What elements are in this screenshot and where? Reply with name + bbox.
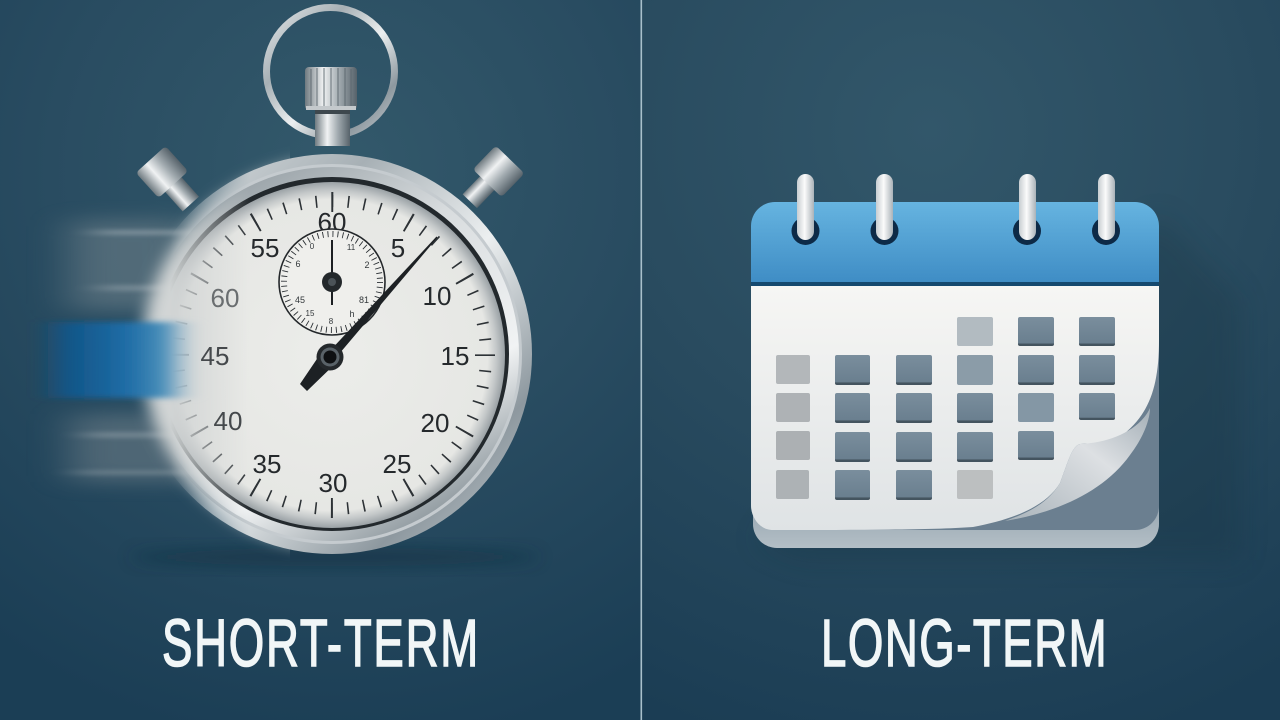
dial numbers: 5 xyxy=(391,233,405,263)
sub-dial xyxy=(279,229,385,335)
minute ticks xyxy=(178,201,486,509)
sub-dial: 2 xyxy=(364,260,370,270)
faded dial numbers: 60 xyxy=(211,283,239,313)
calendar shadow xyxy=(755,215,1240,560)
long second hand xyxy=(300,236,438,391)
motion streaks behind stopwatch xyxy=(70,220,200,482)
calendar date grid xyxy=(776,317,1115,500)
calendar back pages xyxy=(753,300,1159,548)
sub-dial: 15 xyxy=(306,309,315,318)
sub-dial: 6 xyxy=(295,259,301,269)
background: right panel xyxy=(641,0,1280,720)
faded dial numbers: 40 xyxy=(214,406,242,436)
sub-dial: 8 xyxy=(329,317,334,326)
icon: calendar xyxy=(751,174,1240,560)
dial numbers: 15 xyxy=(441,341,469,371)
stopwatch right pusher xyxy=(455,146,525,215)
blurred case silhouette xyxy=(133,153,290,556)
dial numbers: 60 xyxy=(318,207,346,237)
calendar binding rings xyxy=(792,174,1120,245)
heading: short-term: SHORT-TERM xyxy=(162,606,478,681)
sub-dial: 0 xyxy=(310,242,315,251)
sub-dial: 11 xyxy=(347,243,356,252)
dial numbers: 35 xyxy=(253,449,281,479)
stopwatch case xyxy=(174,154,532,554)
background: left panel xyxy=(0,0,641,720)
stopwatch top ring xyxy=(266,8,394,136)
stopwatch left pusher xyxy=(136,146,206,217)
center divider xyxy=(640,0,642,720)
faded dial numbers xyxy=(201,283,242,436)
sub-dial: h xyxy=(349,309,355,319)
dial numbers: 55 xyxy=(251,233,279,263)
calendar page curl flap xyxy=(1005,408,1150,521)
dial numbers: 25 xyxy=(383,449,411,479)
dial numbers: 10 xyxy=(423,281,451,311)
stopwatch floor shadow xyxy=(130,548,540,566)
faded dial numbers: 45 xyxy=(201,341,229,371)
dial numbers xyxy=(251,207,469,498)
stopwatch body fading to the left xyxy=(174,154,532,554)
stopwatch crown xyxy=(305,67,357,146)
dial numbers: 30 xyxy=(319,468,347,498)
stopwatch dial face xyxy=(159,182,505,528)
dial numbers: 20 xyxy=(421,408,449,438)
icon: stopwatch with motion blur xyxy=(35,8,540,566)
calendar front page with curl xyxy=(751,285,1159,530)
sub-dial: 81 xyxy=(359,295,369,305)
heading: long-term: LONG-TERM xyxy=(821,606,1107,681)
sub-dial: 45 xyxy=(295,295,305,305)
blue motion streak xyxy=(35,322,200,398)
calendar blue header xyxy=(751,202,1159,282)
